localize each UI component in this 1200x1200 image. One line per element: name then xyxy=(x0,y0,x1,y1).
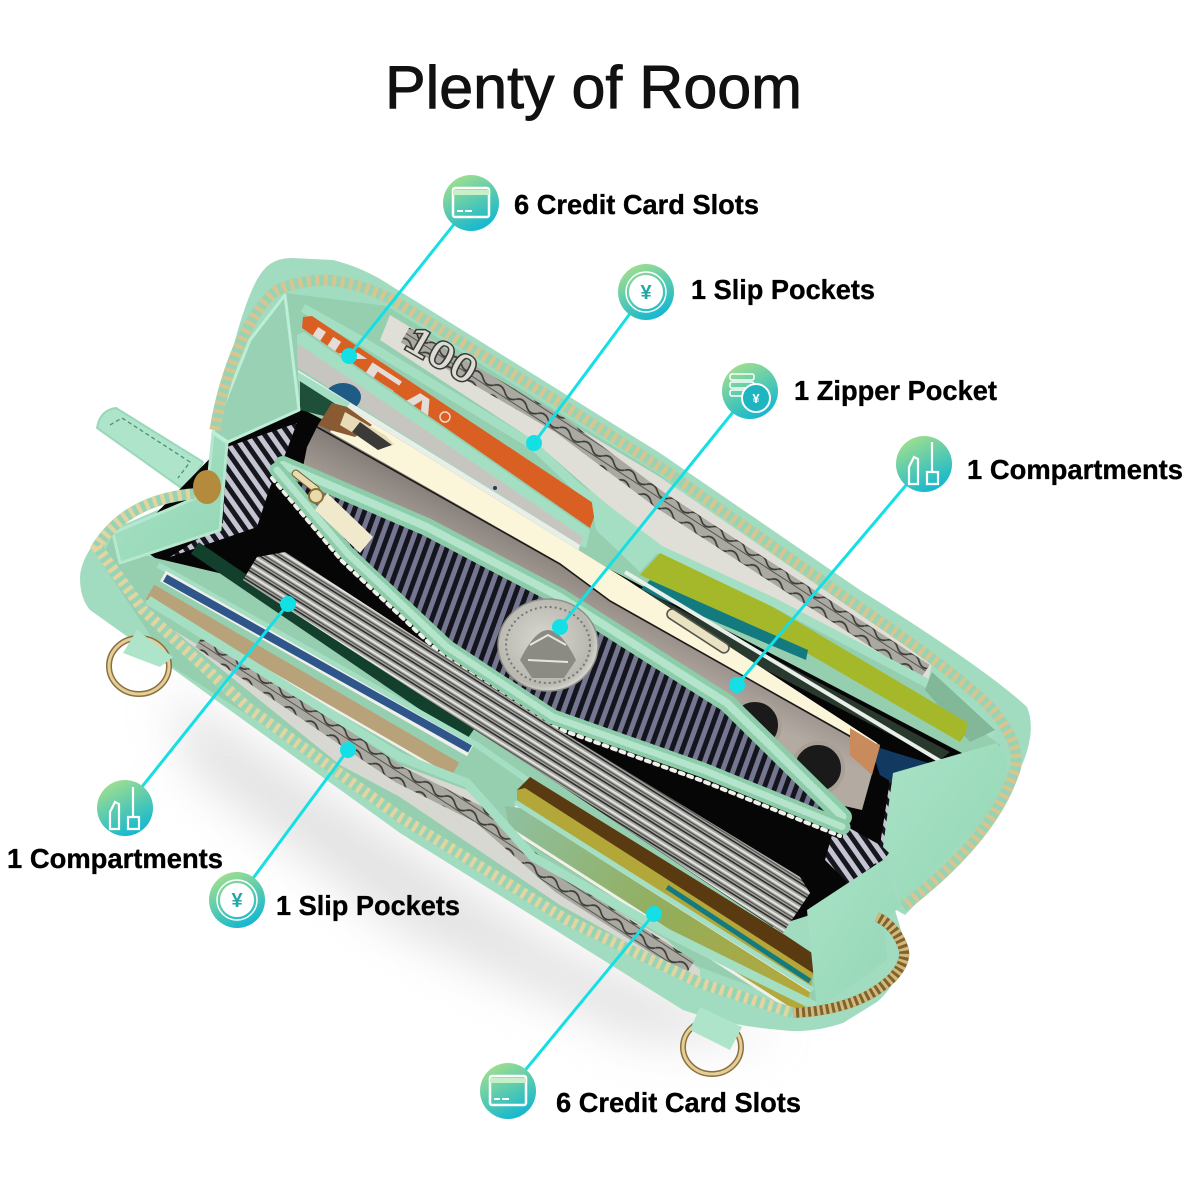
callout: 1 slip pockets (bottom): 1 Slip Pockets xyxy=(276,890,460,921)
blue card xyxy=(163,576,470,751)
callout: 1 zipper pocket xyxy=(552,363,997,635)
bottom D-ring xyxy=(683,1007,742,1074)
striped lining, right xyxy=(835,780,895,865)
callout: 6 credit card slots (bottom): 6 Credit Card Slots xyxy=(556,1087,801,1118)
cash stack xyxy=(243,552,810,933)
callout: 1 compartments (left) xyxy=(7,596,296,874)
lower bill xyxy=(173,630,700,983)
callout: 1 slip pockets (top): ¥ xyxy=(640,282,652,304)
callout: 1 compartments (right): 1 Compartments xyxy=(967,454,1183,485)
callout: 6 credit card slots (top): 6 Credit Card Slots xyxy=(514,189,759,220)
wallet shadow xyxy=(170,690,780,1040)
yellow card xyxy=(517,788,813,987)
callout: 1 compartments (left): 1 Compartments xyxy=(7,843,223,874)
callout: 1 compartments (right) xyxy=(729,436,1183,693)
callout: 6 credit card slots (bottom) xyxy=(480,906,801,1119)
callout: 1 slip pockets (top) xyxy=(526,264,875,451)
right flap upper xyxy=(883,743,1007,907)
striped zipper pocket xyxy=(280,465,843,817)
brown card xyxy=(517,777,815,975)
callout: 1 slip pockets (top): 1 Slip Pockets xyxy=(691,274,875,305)
green olive card xyxy=(505,806,810,1012)
phone xyxy=(303,403,880,810)
bill denomination: 100 xyxy=(398,318,485,394)
zipper pocket strips xyxy=(272,465,843,836)
dark pocket band xyxy=(195,548,470,735)
striped lining, left xyxy=(170,423,297,557)
right yellow card xyxy=(640,553,968,742)
bill pocket strip xyxy=(303,308,993,735)
lower wallet body xyxy=(80,487,907,1031)
coin xyxy=(498,599,598,691)
left D-ring xyxy=(109,630,173,694)
strap tab xyxy=(97,408,203,492)
pale card xyxy=(297,332,590,548)
callout: 6 credit card slots (top) xyxy=(341,175,759,364)
callout: 1 slip pockets (bottom) xyxy=(209,742,460,928)
title: Plenty of Room xyxy=(385,54,802,121)
wallet interior xyxy=(130,296,1000,950)
gold zippers xyxy=(97,280,1016,1013)
right flap lower xyxy=(807,860,900,1010)
upper pockets xyxy=(285,293,1000,790)
bill xyxy=(380,315,932,684)
callout: 1 slip pockets (bottom): ¥ xyxy=(231,890,243,912)
left flap upper xyxy=(213,295,299,442)
lower pockets xyxy=(100,535,820,1012)
zipper pull xyxy=(291,469,373,553)
zipper slider xyxy=(193,470,221,504)
wallet illustration xyxy=(80,258,1031,1074)
upper pockets: IKEA xyxy=(293,317,449,443)
lower pocket strip xyxy=(148,600,817,1007)
tan card xyxy=(150,592,455,770)
callout: 1 zipper pocket: ¥ xyxy=(752,391,760,406)
left flap lower xyxy=(113,433,227,563)
pocket join xyxy=(590,490,660,572)
upper wallet body xyxy=(212,258,1031,915)
orange card xyxy=(302,316,595,528)
callout: 1 zipper pocket: 1 Zipper Pocket xyxy=(794,375,997,406)
